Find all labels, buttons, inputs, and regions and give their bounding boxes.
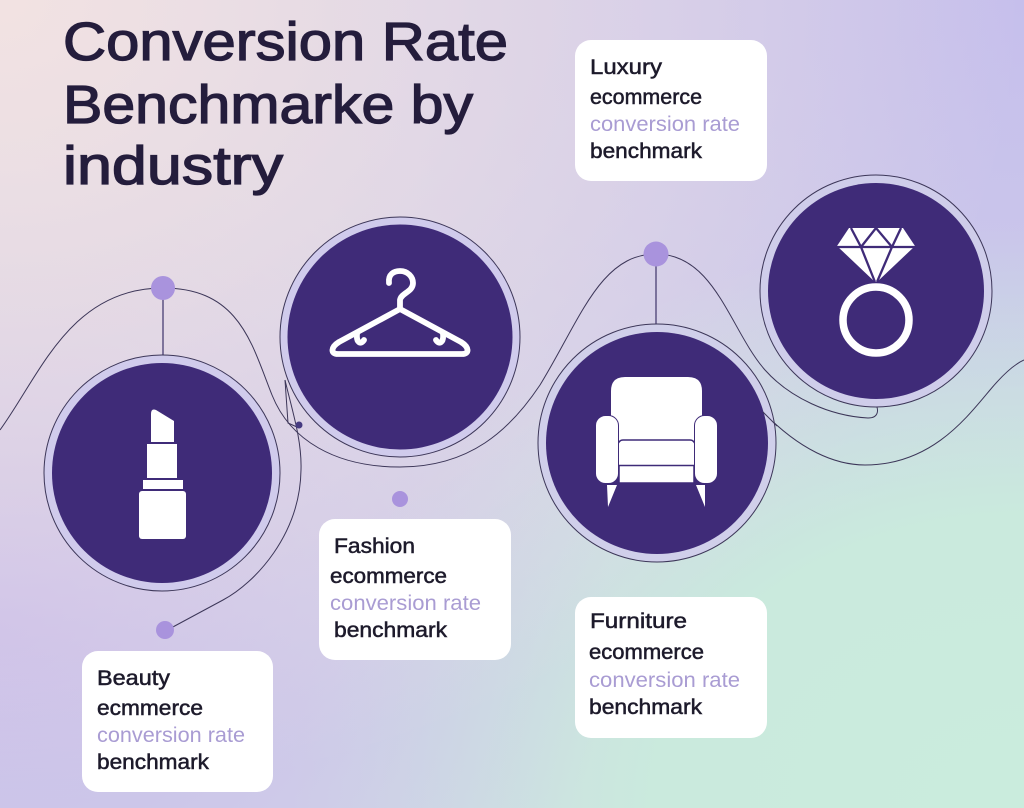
connecting curves — [0, 254, 1024, 628]
icon circle: beauty lipstick — [44, 355, 280, 591]
card: beauty — [82, 651, 273, 792]
title: Conversion Rate — [63, 12, 508, 72]
card: fashion — [319, 519, 511, 660]
title — [63, 12, 508, 196]
icon: hanger — [332, 271, 468, 354]
card: fashion: ecommerce — [330, 565, 447, 588]
card: furniture — [575, 597, 767, 738]
curve overlays crossing the rings — [285, 380, 777, 428]
card: furniture: benchmark — [589, 696, 703, 719]
card: luxury: conversion rate — [590, 113, 740, 136]
card: luxury: ecommerce — [590, 86, 702, 109]
icon: lipstick — [139, 410, 186, 539]
card: fashion: benchmark — [334, 619, 448, 642]
icon circle: luxury diamond ring — [760, 175, 992, 407]
card: furniture: Furniture — [590, 610, 687, 633]
card: beauty: ecmmerce — [97, 697, 203, 720]
card: beauty: Beauty — [97, 667, 171, 690]
icon circle: furniture armchair — [538, 324, 776, 562]
card: beauty: conversion rate — [97, 724, 245, 747]
card: luxury: benchmark — [590, 140, 703, 163]
icon circle: fashion hanger — [280, 217, 520, 457]
icon: armchair — [596, 377, 718, 507]
card: fashion: conversion rate — [330, 592, 481, 615]
card: beauty: benchmark — [97, 751, 210, 774]
card: luxury — [575, 40, 767, 181]
card: fashion: Fashion — [334, 535, 415, 558]
timeline stem: beauty — [162, 298, 164, 358]
icon: diamond ring — [837, 228, 915, 353]
marker dots — [151, 242, 668, 639]
card: furniture: conversion rate — [589, 669, 740, 692]
timeline stem: furniture — [655, 264, 657, 326]
card: furniture: ecommerce — [589, 641, 704, 664]
card: luxury: Luxury — [590, 56, 663, 79]
title: Benchmarke by — [63, 75, 473, 135]
title: industry — [63, 136, 283, 196]
